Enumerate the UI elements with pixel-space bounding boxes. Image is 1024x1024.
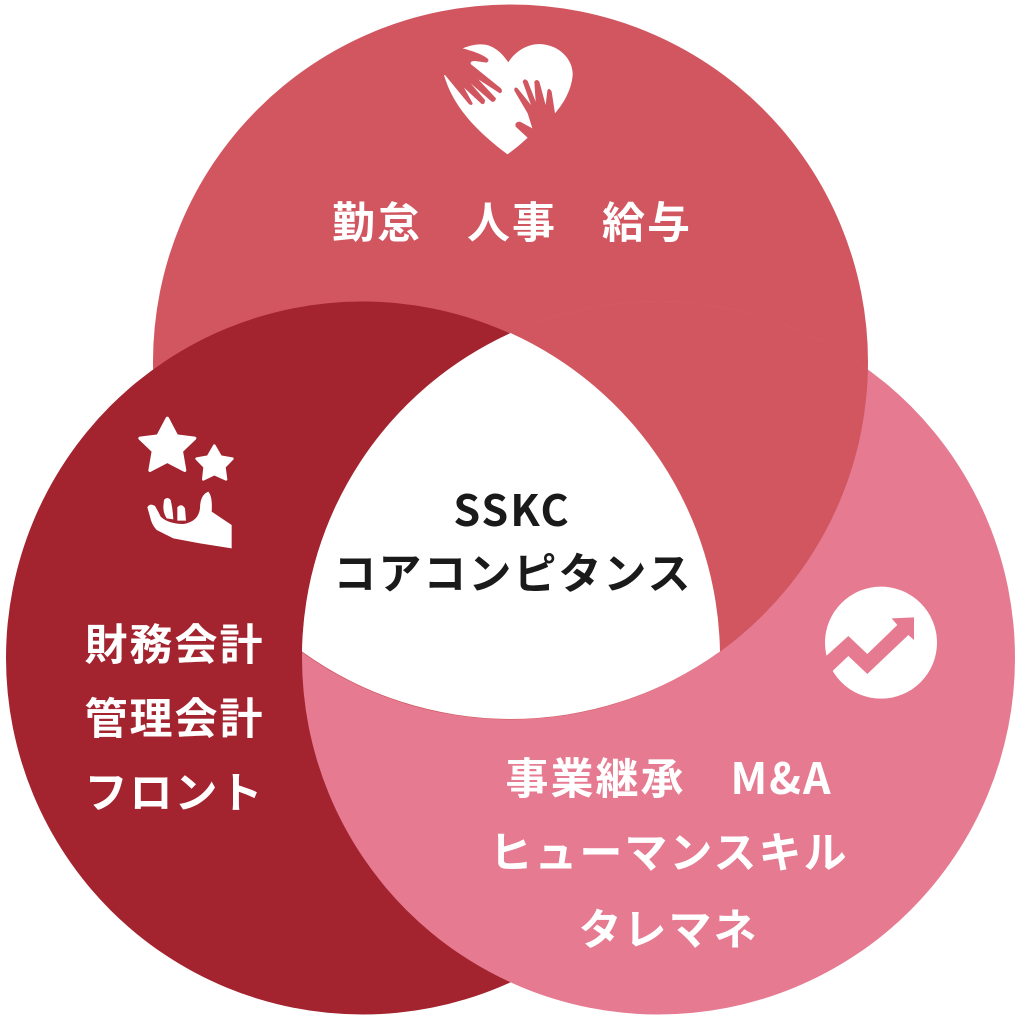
overlap: centre: [302, 333, 720, 719]
text: centre: SSKC: [453, 477, 571, 539]
text: centre: コアコンピタンス: [333, 540, 693, 602]
overlap: top over right: [302, 302, 868, 720]
circle: top: [153, 4, 868, 720]
circle: left: [6, 302, 719, 1014]
text: left circle: 財務会計: [84, 611, 264, 673]
circle: right: [302, 302, 1015, 1014]
heading: top circle: 勤怠 人事 給与: [332, 189, 692, 251]
text: right circle: ヒューマンスキル: [489, 819, 849, 881]
text: left circle: フロント: [84, 759, 264, 821]
text: right circle: タレマネ: [578, 896, 758, 958]
icon: trend arrow: [820, 587, 937, 699]
text: left circle: 管理会計: [84, 685, 264, 747]
icon: stars and hand: [140, 418, 232, 548]
text: left circle: [84, 611, 264, 821]
text: right circle: [489, 745, 849, 958]
text: centre: [333, 477, 693, 602]
icon: heart with hands: [437, 37, 573, 160]
text: right circle: 事業継承 M&A: [505, 745, 833, 807]
